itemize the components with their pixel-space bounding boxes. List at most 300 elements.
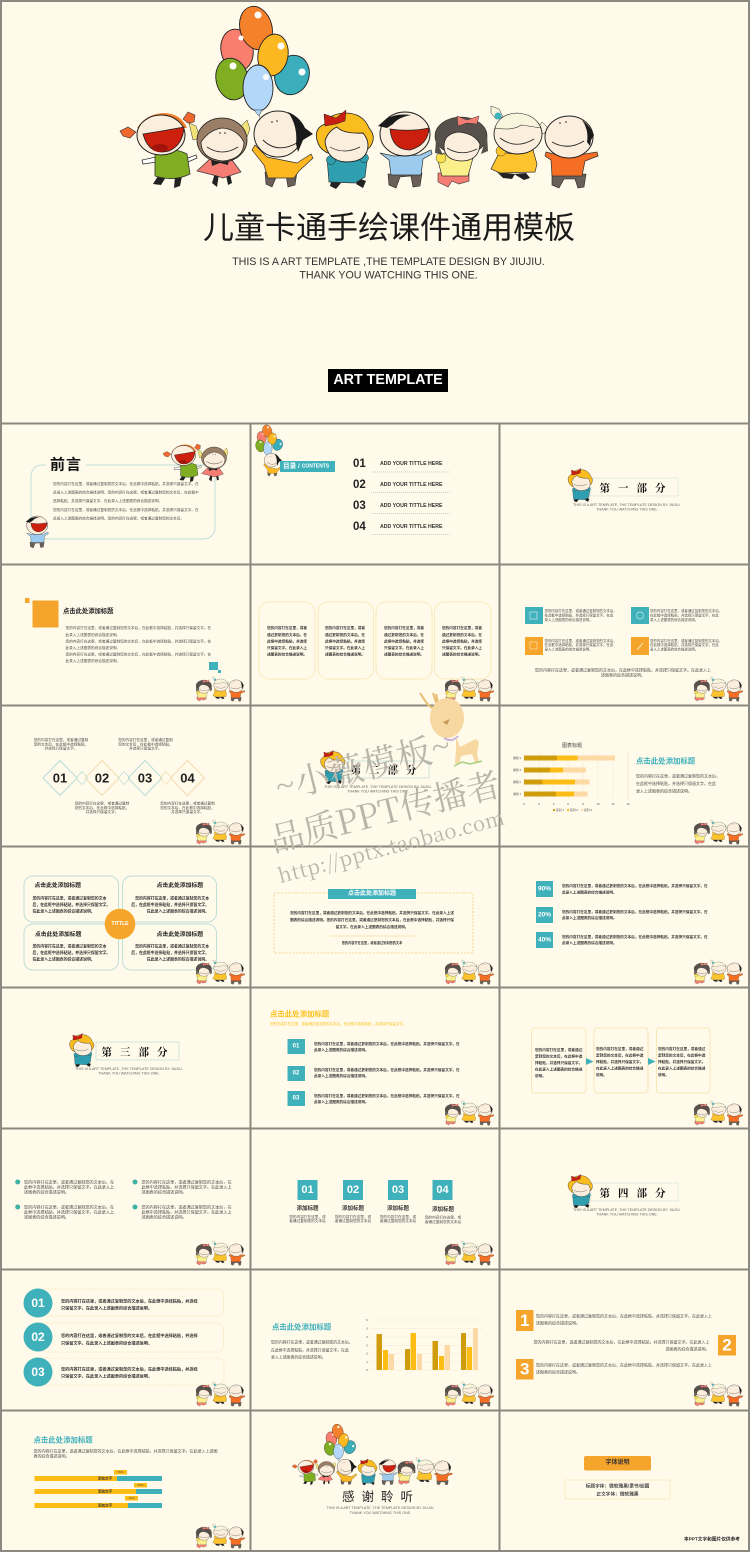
item 90%: 90% — [538, 886, 551, 892]
item 2: 在此框中选择粘贴，并选择只保留文字。在此 — [650, 612, 719, 618]
panel: dashed text frame — [274, 889, 494, 984]
diamond 01 — [43, 760, 77, 796]
item 4: 在此框中选择粘贴，并选择只保留文字。在此 — [650, 642, 719, 647]
pill 02: 只保留文字。在此录入上述图表的综合描述说明。 — [61, 1340, 152, 1346]
title: 儿童卡通手绘课件通用模板 — [203, 210, 575, 246]
item 3: 在此框中选择粘贴，并选择只保留文字。在此 — [544, 642, 614, 647]
card 4: 述图表的综合描述说明。 — [442, 652, 482, 656]
list row 04: 04 — [353, 521, 366, 533]
icon: children — [445, 677, 494, 701]
caption 01 — [34, 737, 89, 750]
paragraphs: 此录入上述图表的综合描述说明。 — [66, 632, 120, 637]
caption 03: 并选择只保留文字。 — [129, 746, 162, 750]
item 4: 录入上述图表的综合描述说明。 — [650, 646, 698, 652]
font info box: 标题字体：微软雅黑/隶书/幼圆 — [586, 1482, 650, 1490]
column chart — [366, 1318, 483, 1372]
caption 04 — [160, 800, 215, 814]
quadrant top left: 在此录入上述图表的综合描述说明。 — [32, 908, 95, 914]
quadrant bottom right: 您的内容打在这里，或者通过复制您的文本 — [135, 944, 209, 948]
pill 03: 03 — [31, 1365, 45, 1379]
bullet 4: 此框中选择粘贴，并选择只保留文字。在此录入上 — [142, 1208, 232, 1214]
caption 04: 并选择只保留文字。 — [171, 809, 204, 814]
item 20% — [536, 907, 708, 923]
list row 04 — [353, 521, 450, 534]
watermark: http://pptx.taobao.com — [274, 802, 507, 889]
icon: children — [694, 820, 743, 844]
icon: children — [694, 1101, 743, 1125]
icon: child — [70, 1033, 94, 1067]
panel: preface — [26, 444, 228, 548]
box 2: 在此录入上述图表的综合描述 — [596, 1066, 644, 1070]
section heading: 第四部分 — [600, 1186, 674, 1200]
heading: 点击此处添加标题 — [270, 1010, 330, 1018]
box 1 — [532, 1028, 586, 1093]
card 2: 您的内容打在这里，或者 — [325, 625, 365, 630]
item 01: 此录入上述图表的综合描述说明。 — [314, 1047, 369, 1052]
icon: children — [445, 960, 494, 984]
column 02: 02 — [347, 1184, 359, 1196]
item 03: 您的内容打在这里，或者通过复制您的文本后，在此框中选择粘贴，并选择只保留文字。在 — [314, 1093, 460, 1098]
column 02 — [335, 1180, 372, 1223]
center badge: TITTLE — [112, 921, 129, 927]
card 3 — [376, 602, 432, 679]
icon: children — [196, 1241, 245, 1265]
item 02: 此录入上述图表的综合描述说明。 — [314, 1073, 369, 1078]
caption 01: 并选择只保留文字。 — [45, 746, 77, 750]
bullet 1: 此框中选择粘贴，并选择只保留文字。在此录入上 — [24, 1184, 114, 1190]
note 1: 1 — [520, 1311, 529, 1330]
panel: pill list — [24, 1288, 245, 1406]
box 1: 您的内容打在这里，或者通过 — [535, 1047, 583, 1052]
diamond 03: 03 — [138, 770, 152, 786]
progress bar 1: 添加文字 — [98, 1476, 113, 1480]
icon: children — [196, 677, 245, 701]
card 4 — [434, 602, 491, 679]
caption 03: 您的文本后，在此框中选择粘贴， — [118, 742, 173, 746]
progress bar 2 — [34, 1483, 162, 1494]
caption 04: 您的文本后，在此框中选择粘贴， — [160, 805, 215, 810]
note 3: 您的内容打在这里，或者通过复制您的文本后，在此框中选择粘贴，并选择只保留文字。在此录入上 — [536, 1362, 712, 1368]
caption 02 — [75, 800, 130, 814]
note 2: 2 — [722, 1336, 732, 1354]
section caption — [573, 503, 681, 512]
chart: 0 — [523, 802, 525, 806]
pill 01: 01 — [31, 1296, 45, 1310]
label button: 字体说明 — [605, 1458, 630, 1466]
card 1: 只保留文字。在此录入上 — [267, 645, 307, 650]
paragraphs: 此录入上述图表的综合描述说明。 — [66, 645, 120, 650]
panel: contents — [254, 424, 450, 534]
progress bar 3: 添加文字 — [98, 1502, 113, 1508]
bullet 2: 此框中选择粘贴，并选择只保留文字。在此录入上 — [142, 1184, 232, 1190]
pill 01: 您的内容打在这里，或者通过复制您的文本后，在此框中选择粘贴，并选择 — [61, 1298, 198, 1304]
body text: 选择粘贴，并选择只保留文字。在此录入上述图表的综合描述说明。 — [53, 498, 162, 503]
icon: children — [196, 960, 245, 984]
chart: 系列 3 — [584, 808, 592, 812]
column 04: 04 — [436, 1184, 449, 1196]
card 2 — [318, 602, 374, 679]
item 90%: 您的内容打在这里，或者通过复制您的文本后，在此框中选择粘贴，并选择只保留文字。在 — [562, 883, 708, 888]
progress bar 1: 59% — [117, 1470, 124, 1474]
item 02 — [288, 1066, 460, 1081]
item 40%: 此录入上述图表的综合描述说明。 — [562, 940, 617, 945]
chart: 6 — [567, 802, 569, 806]
panel: horizontal bar chart — [513, 742, 743, 844]
panel: progress bars — [34, 1436, 245, 1548]
bullet 4: 述图表的综合描述说明。 — [142, 1214, 187, 1220]
caption 03 — [118, 737, 173, 750]
section caption: THIS IS A ART TEMPLATE ,THE TEMPLATE DESIGN BY JIUJIU. — [324, 785, 432, 789]
arrow 1 — [586, 1058, 594, 1065]
contents label: 目录 / CONTENTS — [283, 462, 330, 470]
center badge — [105, 909, 135, 939]
description: 表的综合描述说明。 — [34, 1452, 70, 1458]
badge: ART TEMPLATE: ART TEMPLATE — [333, 372, 443, 388]
quadrant bottom right: 后，在此框中选择粘贴，并选择只保留文字。 — [131, 950, 209, 955]
card 2: 通过复制您的文本后，在 — [325, 632, 365, 637]
description — [34, 1448, 218, 1458]
heading bar — [328, 889, 416, 899]
section caption: THIS IS A ART TEMPLATE ,THE TEMPLATE DESIGN BY JIUJIU. — [573, 1208, 681, 1212]
diamond 04 — [170, 760, 204, 796]
box 3: 复制您的文本后，在此框中选 — [658, 1052, 706, 1058]
item 40% — [536, 932, 708, 948]
icon: children — [445, 1101, 494, 1125]
chart: 8 — [582, 802, 584, 806]
chart: 2 — [538, 802, 540, 806]
bullet 3 — [15, 1204, 114, 1220]
note 2 — [534, 1335, 736, 1356]
note 2: 述图表的综合描述说明。 — [666, 1346, 710, 1352]
item 1: 录入上述图表的综合描述说明。 — [544, 617, 593, 622]
card 1: 此框中选择粘贴，并选择 — [267, 638, 307, 644]
column chart: 4 — [366, 1335, 368, 1339]
bullet 2 — [132, 1178, 232, 1194]
list row 02: ADD YOUR TITTLE HERE — [380, 482, 443, 488]
column 01: 01 — [301, 1184, 314, 1196]
quadrant bottom left: 点击此处添加标题 — [35, 930, 82, 938]
column 04: 者通过复制您的文本后 — [425, 1219, 462, 1224]
watermark: ~小薇模板~ — [269, 719, 456, 811]
panel: diamonds — [34, 737, 245, 844]
chart: 类别 4 — [513, 756, 521, 760]
bullet 4 — [132, 1204, 232, 1220]
panel: four quadrants — [24, 876, 245, 984]
icon: child — [26, 516, 48, 548]
item 02: 02 — [293, 1070, 300, 1076]
column chart: 1 — [366, 1360, 368, 1364]
box 3: 您的内容打在这里，或者通过 — [658, 1046, 706, 1051]
footer note: 本PPT文字和图片仅供参考 — [684, 1536, 740, 1542]
section caption — [324, 785, 432, 794]
icon: children — [694, 677, 743, 701]
quadrant top left: 后，在此框中选择粘贴，并选择只保留文字。 — [32, 902, 110, 907]
note 1: 述图表的综合描述说明。 — [536, 1320, 580, 1326]
panel: section three — [70, 1033, 183, 1076]
chart: 系列 1 — [556, 808, 564, 812]
dashed frame — [274, 893, 473, 953]
paragraphs: 您的内容打在这里，或者通过复制您的文本后，在此框中选择粘贴，并选择只保留文字。在 — [66, 652, 211, 656]
note 3: 3 — [520, 1360, 529, 1378]
diamond 04: 04 — [180, 770, 195, 786]
panel: process flow — [532, 1028, 743, 1125]
bullet 3: 此框中选择粘贴，并选择只保留文字。在此录入上 — [24, 1208, 114, 1214]
heading: 点击此处添加标题 — [63, 606, 114, 615]
item 1: 在此框中选择粘贴，并选择只保留文字。在此 — [544, 612, 614, 618]
caption 03: 您的内容打在这里，或者通过复制 — [118, 737, 173, 742]
chart: 14 — [626, 802, 630, 806]
panel: font notes — [565, 1456, 740, 1542]
bullet 3: 述图表的综合描述说明。 — [24, 1214, 69, 1220]
list row 01: 01 — [353, 458, 366, 470]
chart: 系列 2 — [570, 808, 578, 812]
body text: 您的内容打在这里，或者通过复制您的文本后，在此框中选择粘贴，并选择只保留文字。在 — [53, 507, 199, 512]
item 01 — [288, 1039, 460, 1054]
badge: ART TEMPLATE — [328, 369, 448, 392]
column 01 — [289, 1180, 326, 1223]
box 3: 说明。 — [658, 1072, 669, 1077]
item 4: 您的内容打在这里，或者通过复制您的文本后， — [650, 638, 722, 643]
quadrant top right: 后，在此框中选择粘贴，并选择只保留文字。 — [131, 902, 209, 907]
note 1 — [516, 1310, 712, 1331]
summary text: 您的内容打在这里，或者通过复制您的文本后，在此框中选择粘贴，并选择只保留文字。在此录入上 — [535, 666, 711, 672]
rounded text frame — [31, 465, 215, 539]
illustration: pale deer — [420, 693, 482, 766]
paragraphs: 您的内容打在这里，或者通过复制您的文本后，在此框中选择粘贴，并选择只保留文字。在 — [66, 625, 211, 630]
pill 02: 您的内容打在这里，或者通过复制您的文本后，在此框中选择粘贴，并选择 — [61, 1332, 198, 1338]
pill 03: 只保留文字。在此录入上述图表的综合描述说明。 — [61, 1372, 152, 1378]
diamond 03 — [128, 760, 162, 796]
panel: four cards — [259, 602, 494, 701]
box 1: 在此录入上述图表的综合描述 — [535, 1066, 583, 1072]
box 3: 择粘贴，并选择只保留文字。 — [658, 1059, 705, 1064]
section frame — [344, 761, 429, 778]
note 3: 述图表的综合描述说明。 — [536, 1368, 580, 1374]
box 2: 说明。 — [596, 1072, 607, 1077]
item 02: 您的内容打在这里，或者通过复制您的文本后，在此框中选择粘贴，并选择只保留文字。在 — [314, 1067, 460, 1072]
quadrant bottom left: 后，在此框中选择粘贴，并选择只保留文字。 — [32, 950, 110, 955]
item 20%: 您的内容打在这里，或者通过复制您的文本后，在此框中选择粘贴，并选择只保留文字。在 — [562, 909, 708, 914]
box 2: 复制您的文本后，在此框中选 — [596, 1052, 644, 1058]
description: 录入上述图表的综合描述说明。 — [636, 788, 692, 794]
column chart: 0 — [366, 1368, 368, 1372]
body text — [53, 481, 199, 520]
heading: 前言 — [50, 456, 82, 474]
card 1: 述图表的综合描述说明。 — [267, 652, 307, 656]
icon: balloons — [254, 424, 284, 462]
box 2: 择粘贴，并选择只保留文字。 — [596, 1059, 643, 1064]
panel: numbered list — [270, 1010, 494, 1125]
panel: three numbered notes — [516, 1310, 743, 1406]
description: 在此框中选择粘贴，并选择只保留文字。在此 — [636, 780, 716, 786]
chart: 类别 1 — [513, 792, 521, 796]
pill 02: 02 — [31, 1330, 45, 1344]
card 1: 您的内容打在这里，或者 — [267, 625, 307, 630]
box 2: 您的内容打在这里，或者通过 — [596, 1046, 644, 1051]
column 02: 者通过复制您的文本后 — [335, 1218, 372, 1223]
box 1: 择粘贴，并选择只保留文字。 — [535, 1060, 582, 1065]
item 1 — [525, 607, 617, 624]
item 1: 您的内容打在这里，或者通过复制您的文本后， — [544, 608, 617, 613]
item 01: 您的内容打在这里，或者通过复制您的文本后，在此框中选择粘贴，并选择只保留文字。在 — [314, 1041, 460, 1046]
bullet 1: 述图表的综合描述说明。 — [24, 1188, 69, 1194]
heading: 感谢聆听 — [342, 1489, 420, 1504]
progress bar 2: 65% — [137, 1483, 144, 1487]
quadrant top left: 点击此处添加标题 — [34, 881, 81, 889]
caption 01: 您的文本后，在此框中选择粘贴， — [34, 742, 88, 746]
item 3: 您的内容打在这里，或者通过复制您的文本后， — [544, 638, 617, 643]
column 03: 添加标题 — [387, 1204, 409, 1212]
bullet 1 — [15, 1178, 114, 1194]
card 4: 此框中选择粘贴，并选择 — [442, 638, 482, 644]
quadrant top left: 您的内容打在这里，或者通过复制您的文本 — [32, 896, 107, 900]
caption: THANK YOU WATCHING THIS ONE. — [350, 1511, 411, 1515]
panel: title and paragraphs — [25, 598, 245, 701]
section frame — [591, 478, 678, 496]
panel: bullet points — [15, 1178, 245, 1265]
item 4 — [631, 637, 722, 655]
item 2: 您的内容打在这里，或者通过复制您的文本后， — [650, 608, 722, 613]
caption: THIS IS A ART TEMPLATE ,THE TEMPLATE DESIGN BY JIUJIU. — [327, 1506, 434, 1510]
note 1: 您的内容打在这里，或者通过复制您的文本后，在此框中选择粘贴，并选择只保留文字。在此录入上 — [536, 1312, 712, 1318]
quadrant top right: 您的内容打在这里，或者通过复制您的文本 — [135, 896, 209, 900]
summary text: 述图表的综合描述说明。 — [601, 672, 645, 678]
panel: section four — [568, 1174, 681, 1216]
column 01: 添加标题 — [296, 1204, 319, 1212]
item 01: 01 — [293, 1044, 300, 1050]
illustration: row of children holding hands — [120, 106, 598, 189]
progress bar 2: 添加文字 — [98, 1488, 113, 1494]
list row 02 — [353, 479, 450, 492]
section heading: 第三部分 — [102, 1044, 176, 1060]
contents label — [280, 461, 335, 472]
chart: 图表标题 — [562, 742, 582, 749]
quadrant top right: 在此录入上述图表的综合描述说明。 — [147, 908, 209, 914]
icon: children — [694, 1382, 743, 1406]
panel: four icon items — [525, 607, 743, 701]
body text: 您的内容打在这里，或者通过复制您的文本后，在此框中选择粘贴，并选择只保留文字。在 — [53, 481, 199, 486]
item 03 — [288, 1091, 460, 1106]
card 4: 通过复制您的文本后，在 — [442, 632, 482, 637]
progress bar 3 — [34, 1496, 162, 1508]
item 90%: 此录入上述图表的综合描述说明。 — [562, 890, 617, 894]
panel: column chart — [271, 1318, 494, 1406]
icon: children — [196, 820, 245, 844]
description — [271, 1340, 353, 1360]
heading: 点击此处添加标题 — [272, 1322, 332, 1332]
caption 02: 您的内容打在这里，或者通过复制 — [75, 800, 130, 806]
list row 01 — [353, 458, 450, 472]
icon: child — [264, 453, 282, 476]
section caption: THANK YOU WATCHING THIS ONE. — [596, 508, 658, 512]
column chart: 5 — [366, 1326, 368, 1330]
heading: 点击此处添加标题 — [34, 1436, 93, 1444]
column 01: 您的内容打在这里，或 — [289, 1214, 326, 1219]
quadrant bottom left: 在此录入上述图表的综合描述说明。 — [32, 956, 95, 962]
panel: section one — [568, 468, 681, 512]
caption 01: 您的内容打在这里，或者通过复制 — [34, 737, 89, 742]
pill 01 — [24, 1288, 224, 1318]
note 3 — [516, 1359, 712, 1380]
item 20%: 此录入上述图表的综合描述说明。 — [562, 915, 617, 920]
section caption: THANK YOU WATCHING THIS ONE. — [596, 1212, 658, 1216]
icon: children — [445, 1382, 494, 1406]
panel: section two — [321, 750, 432, 794]
body text: 您的内容打在这里，或者通过复制您的文本后，在此框中选择粘贴，并选择只保留文字。在此录入上述 — [290, 910, 454, 915]
watermark — [264, 719, 507, 889]
section heading: 第二部分 — [350, 762, 424, 778]
section caption: THANK YOU WATCHING THIS ONE. — [98, 1072, 160, 1076]
caption — [327, 1506, 434, 1515]
panel: percentages — [536, 881, 743, 984]
item 20%: 20% — [538, 912, 551, 918]
list row 04: ADD YOUR TITTLE HERE — [380, 524, 443, 530]
column 03: 您的内容打在这里，或 — [380, 1214, 417, 1219]
column 01: 者通过复制您的文本后 — [289, 1218, 326, 1223]
illustration: balloons — [212, 3, 315, 134]
watermark: 品质PPT传播者 — [264, 757, 505, 862]
column 02: 您的内容打在这里，或 — [335, 1214, 372, 1219]
item 90% — [536, 881, 708, 897]
body text: 留文字。在此录入上述图表的综合描述说明。 — [336, 924, 408, 929]
panel: hero cover — [120, 3, 598, 392]
column 03: 03 — [392, 1184, 404, 1196]
subtitle — [232, 256, 545, 282]
label button — [584, 1456, 651, 1470]
icon: children — [445, 1241, 494, 1265]
chart: 10 — [596, 802, 600, 806]
section caption — [573, 1208, 681, 1216]
box 3: 在此录入上述图表的综合描述 — [658, 1066, 706, 1070]
icon: child — [321, 750, 345, 784]
chart: 类别 3 — [513, 768, 521, 772]
note text: 您的内容打在这里，或者通过复制您的文本 — [342, 940, 403, 945]
item 40%: 40% — [538, 936, 551, 944]
item 03: 03 — [293, 1096, 300, 1102]
arrow 2 — [648, 1058, 656, 1065]
pill 03 — [24, 1358, 224, 1386]
card 4: 只保留文字。在此录入上 — [442, 645, 482, 650]
diamond 01: 01 — [53, 770, 67, 786]
note 2: 您的内容打在这里，或者通过复制您的文本后，在此框中选择粘贴，并选择只保留文字。在此录入上 — [534, 1338, 710, 1344]
heading bar: 点击此处添加标题 — [348, 889, 396, 897]
chart: 12 — [611, 802, 615, 806]
column chart: 2 — [366, 1352, 368, 1356]
quadrant bottom left — [24, 924, 118, 970]
paragraphs: 您的内容打在这里，或者通过复制您的文本后，在此框中选择粘贴，并选择只保留文字。在 — [66, 638, 211, 644]
diamond 02 — [85, 760, 119, 796]
item 2 — [631, 607, 722, 624]
chart — [513, 742, 630, 812]
description: 您的内容打在这里，或者通过复制您的文本后， — [636, 772, 720, 778]
card 3: 通过复制您的文本后，在 — [384, 632, 424, 637]
column chart: 3 — [366, 1344, 368, 1348]
quadrant top left — [24, 876, 118, 922]
box 1: 复制您的文本后，在此框中选 — [535, 1054, 583, 1058]
list row 03 — [353, 500, 450, 514]
chart: 类别 2 — [513, 780, 521, 784]
chart: 4 — [553, 802, 555, 806]
card 1: 通过复制您的文本后，在 — [267, 632, 307, 637]
item 3 — [525, 637, 617, 655]
description — [636, 772, 720, 794]
item 3: 录入上述图表的综合描述说明。 — [544, 646, 593, 652]
section caption: THIS IS A ART TEMPLATE ,THE TEMPLATE DESIGN BY JIUJIU. — [75, 1067, 183, 1071]
caption 04: 您的内容打在这里，或者通过复制 — [160, 800, 215, 806]
quadrant bottom left: 您的内容打在这里，或者通过复制您的文本 — [32, 944, 107, 948]
description: 在此框中选择粘贴，并选择只保留文字。在此 — [271, 1348, 349, 1352]
body text: 图表的综合描述说明。您的内容打在这里，或者通过复制您的文本后，在此框中选择粘贴，并选择只保 — [290, 917, 454, 922]
